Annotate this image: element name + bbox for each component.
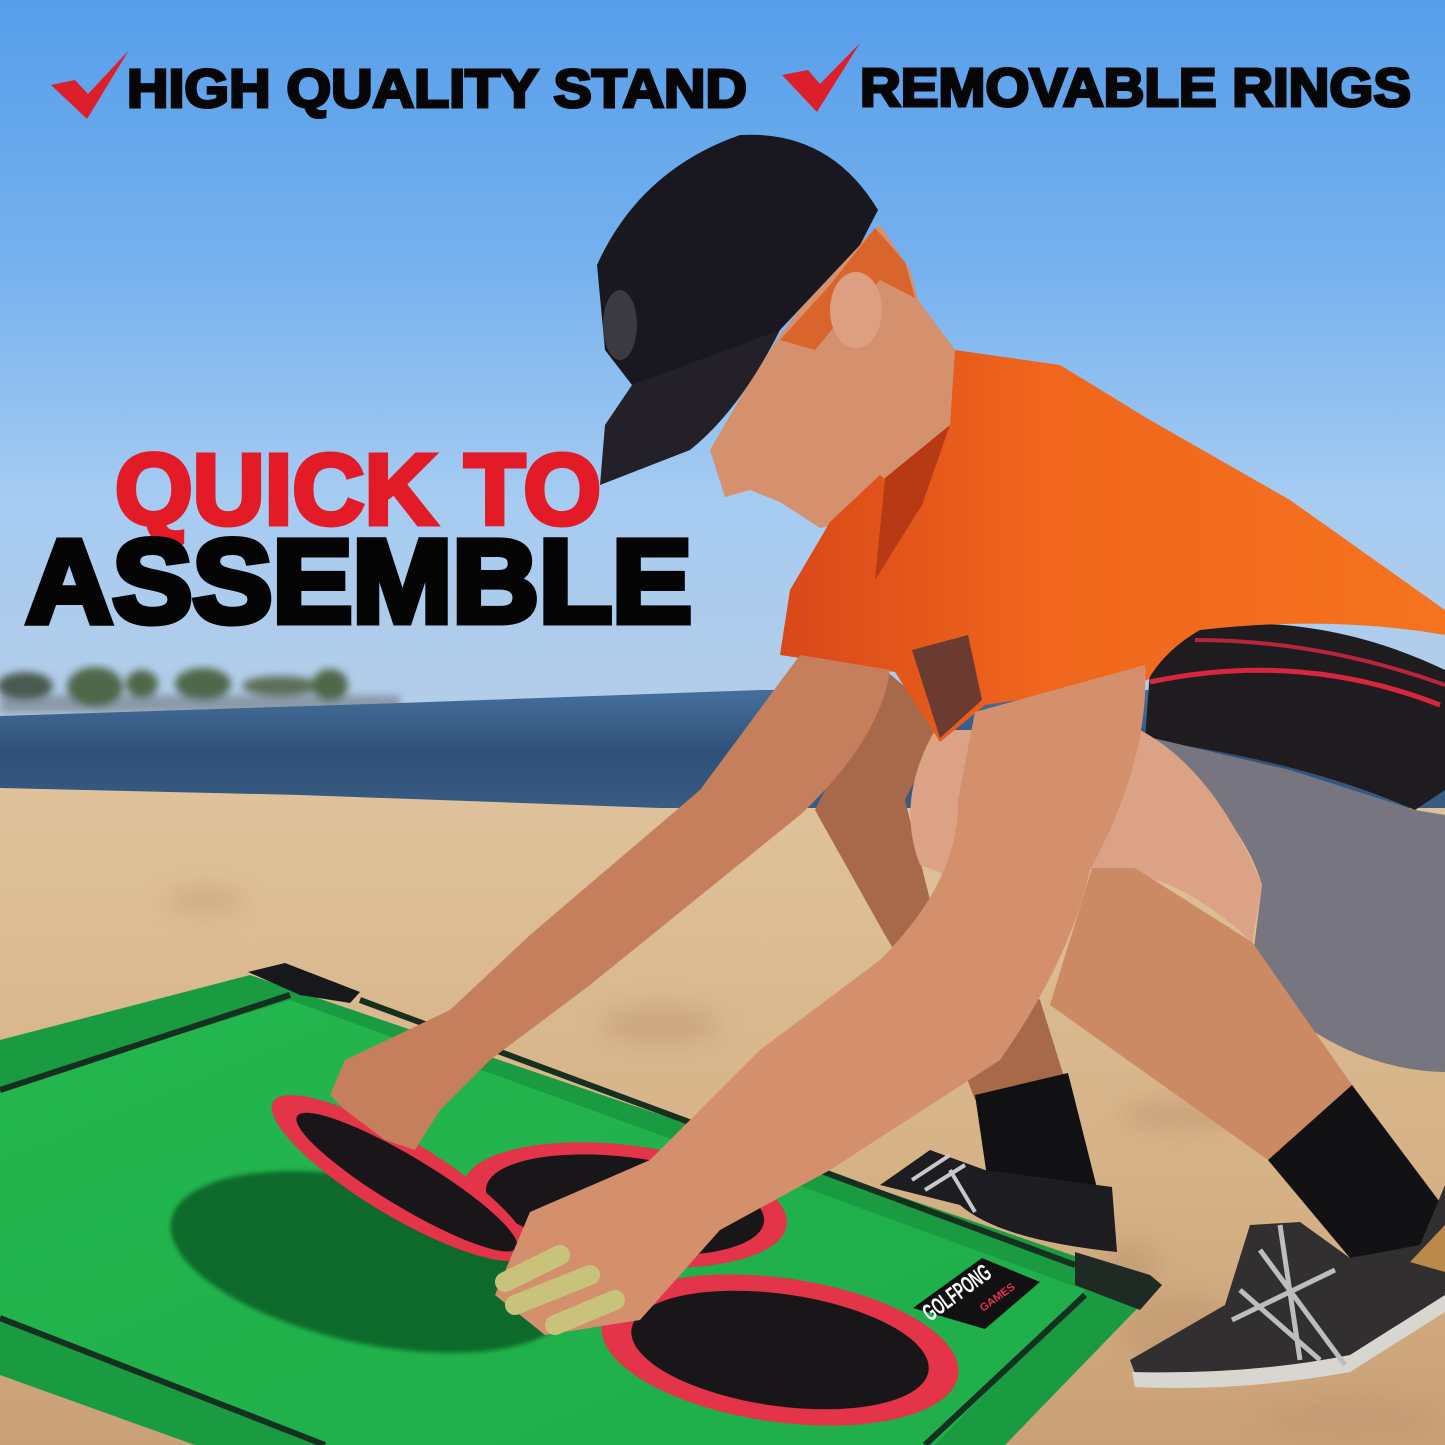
hat [597,135,878,485]
icon: red check 2 [782,43,860,112]
board edge stripes [0,995,1085,1445]
feature: removable rings: REMOVABLE RINGS [860,58,1411,118]
shirt print [912,635,982,738]
headline: check and high quality stand [51,50,747,119]
shoe tan heel [1410,1225,1445,1272]
ring: front [592,1254,968,1445]
arms and hands [330,655,1145,1335]
shorts [1140,735,1445,1072]
brand label: GOLFPONG [918,1259,997,1327]
ear [830,272,882,348]
rear leg [815,670,1065,1100]
thigh [910,730,1262,942]
fingers highlight [505,1255,615,1325]
shoelaces: rear [912,1155,975,1212]
brand label [913,1258,1040,1329]
icon: red check 1 [51,50,129,119]
shadow on board [154,1139,590,1385]
sock: rear [975,1073,1098,1197]
left arm [330,655,890,1150]
headline: check and removable rings [782,43,1411,118]
calf [1050,868,1352,1160]
title: quick to assemble [26,434,692,648]
bag on back [1145,623,1445,810]
shoelaces: front [1232,1225,1345,1365]
title line 1: QUICK TO [115,434,601,546]
shoe: front [1130,1185,1445,1387]
ring: back [456,1126,794,1284]
background: distant trees [0,667,400,713]
sock: front [1268,1085,1442,1258]
shoe: rear [880,1150,1117,1252]
title line 2: ASSEMBLE [26,516,692,648]
background: sand [0,788,1445,1445]
game board [0,963,1162,1445]
person [597,135,1445,1388]
ring: lifted [254,1069,546,1287]
sand texture [165,890,1440,1438]
board frame [0,975,1160,1445]
background: sky [0,0,1445,720]
board corner bracket [248,963,360,1003]
brand label: GAMES [978,1281,1017,1314]
hair [780,228,915,350]
shirt [780,350,1445,742]
background: sea [0,690,1445,820]
board surface [0,1000,1085,1445]
neck and face [710,225,955,528]
feature: high quality stand: HIGH QUALITY STAND [127,59,747,119]
front arm [495,665,1145,1335]
shirt collar shadow [875,425,950,580]
board corner clip [1075,1252,1162,1310]
